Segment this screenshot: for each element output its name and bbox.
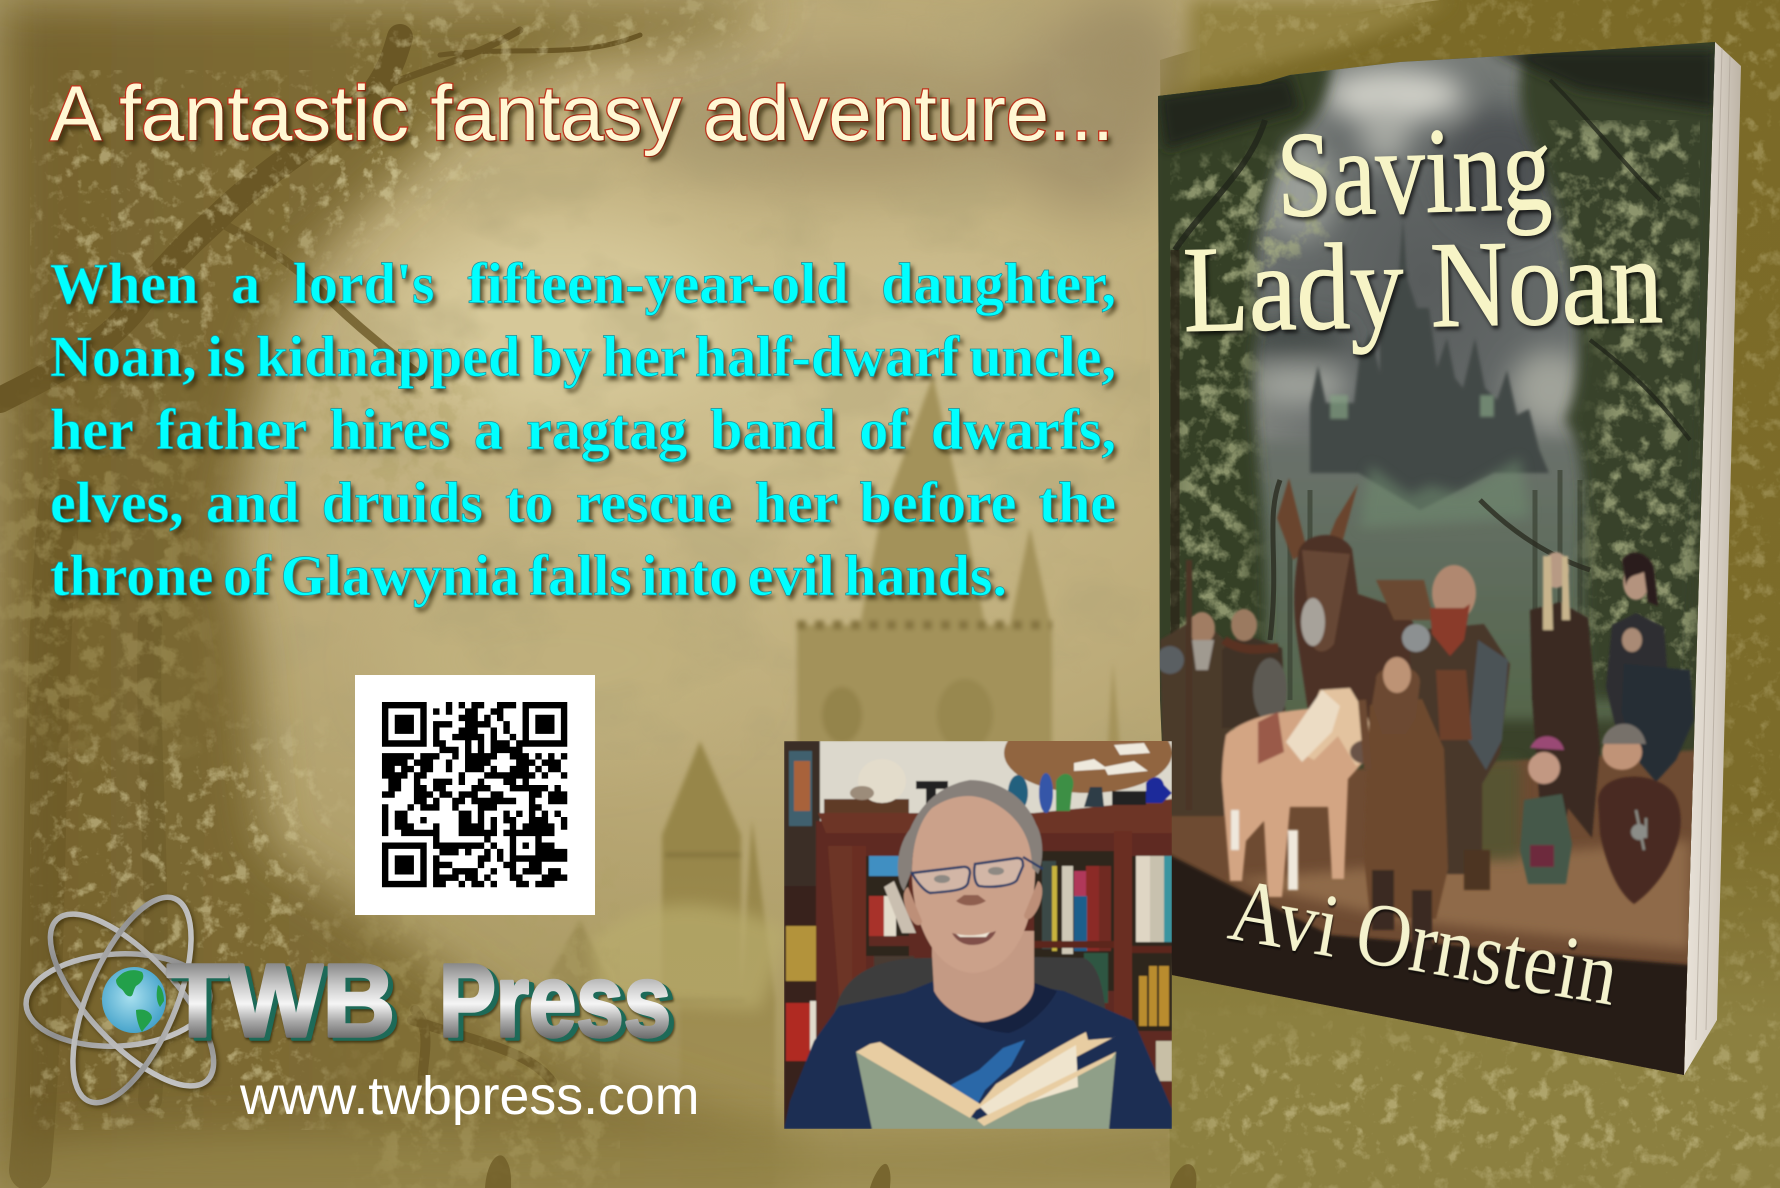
blurb paragraph: throne of Glawynia falls into evil hands. (50, 543, 1007, 608)
side trees (1150, 40, 1340, 680)
book title (1182, 101, 1664, 358)
QR code (355, 675, 595, 915)
right foliage (1160, 0, 1780, 1188)
blurb paragraph: her father hires a ragtag band of dwarfs, (50, 397, 1116, 462)
book: Saving Lady Noan (1158, 42, 1741, 1075)
left foliage mass (0, 0, 800, 1188)
pony (1222, 688, 1382, 897)
foliage speckle highlights (30, 70, 500, 1130)
adventuring party (1156, 478, 1694, 950)
TWB Press wordmark: TWB (167, 943, 395, 1058)
website url: www.twbpress.com (240, 1066, 699, 1126)
TWB Press wordmark (167, 943, 671, 1058)
blurb paragraph (50, 251, 1120, 614)
dark-haired elf (1606, 552, 1667, 724)
blurb paragraph: Noan, is kidnapped by her half-dwarf uncle, (50, 324, 1116, 389)
dark shield (1639, 668, 1694, 782)
bottom silhouettes (485, 1155, 1196, 1188)
helmeted child with round shield (1598, 724, 1681, 904)
glass door shelves and books (866, 851, 1172, 1031)
distant forest (1220, 440, 1620, 720)
left tall column (828, 846, 852, 1011)
author photo (784, 741, 1172, 1129)
neck (932, 931, 1034, 1022)
castle (1310, 218, 1549, 510)
left skull ornament (824, 759, 948, 813)
t-shirt (784, 981, 1172, 1129)
wall plate and figures (1004, 713, 1172, 813)
book pages edge (1684, 42, 1741, 1075)
second dwarf with shield (1222, 609, 1287, 728)
left dwarf (1156, 560, 1234, 816)
chair (834, 957, 1106, 1018)
wall (784, 741, 1172, 1129)
castle towers (535, 376, 1140, 1188)
lower right books (1156, 1041, 1172, 1081)
wall picture (784, 741, 820, 886)
wooden bookcase (816, 821, 1172, 1129)
trunks and branches (0, 30, 640, 1170)
cloud mottling (0, 0, 1150, 760)
shirt print (949, 1040, 1025, 1120)
author name: Avi Ornstein (1222, 861, 1625, 1026)
big red-bearded dwarf (1402, 565, 1510, 890)
door frames (852, 831, 1132, 1031)
title: A fantastic fantasy adventure... (50, 71, 1114, 157)
blurb paragraph: When a lord's fifteen-year-old daughter, (50, 251, 1116, 316)
left shelf (784, 886, 842, 1129)
atom orbits (24, 882, 239, 1118)
dark top edge (1158, 50, 1715, 150)
braided girl dwarf (1362, 657, 1448, 950)
gnome child in pink cap (1520, 736, 1572, 884)
blurb paragraph: elves, and druids to rescue her before the (50, 470, 1116, 535)
open green book (856, 1032, 1116, 1129)
head and face (898, 780, 1043, 973)
book front cover art (1150, 35, 1750, 1085)
ground (1160, 750, 1700, 1075)
lower band (0, 1090, 1780, 1188)
book title: Lady Noan (1182, 212, 1664, 358)
blonde elf (1530, 552, 1600, 868)
globe (102, 967, 166, 1033)
donkey (1277, 478, 1434, 724)
book title: Saving (1275, 101, 1553, 243)
TWB Press logo (23, 894, 676, 1110)
